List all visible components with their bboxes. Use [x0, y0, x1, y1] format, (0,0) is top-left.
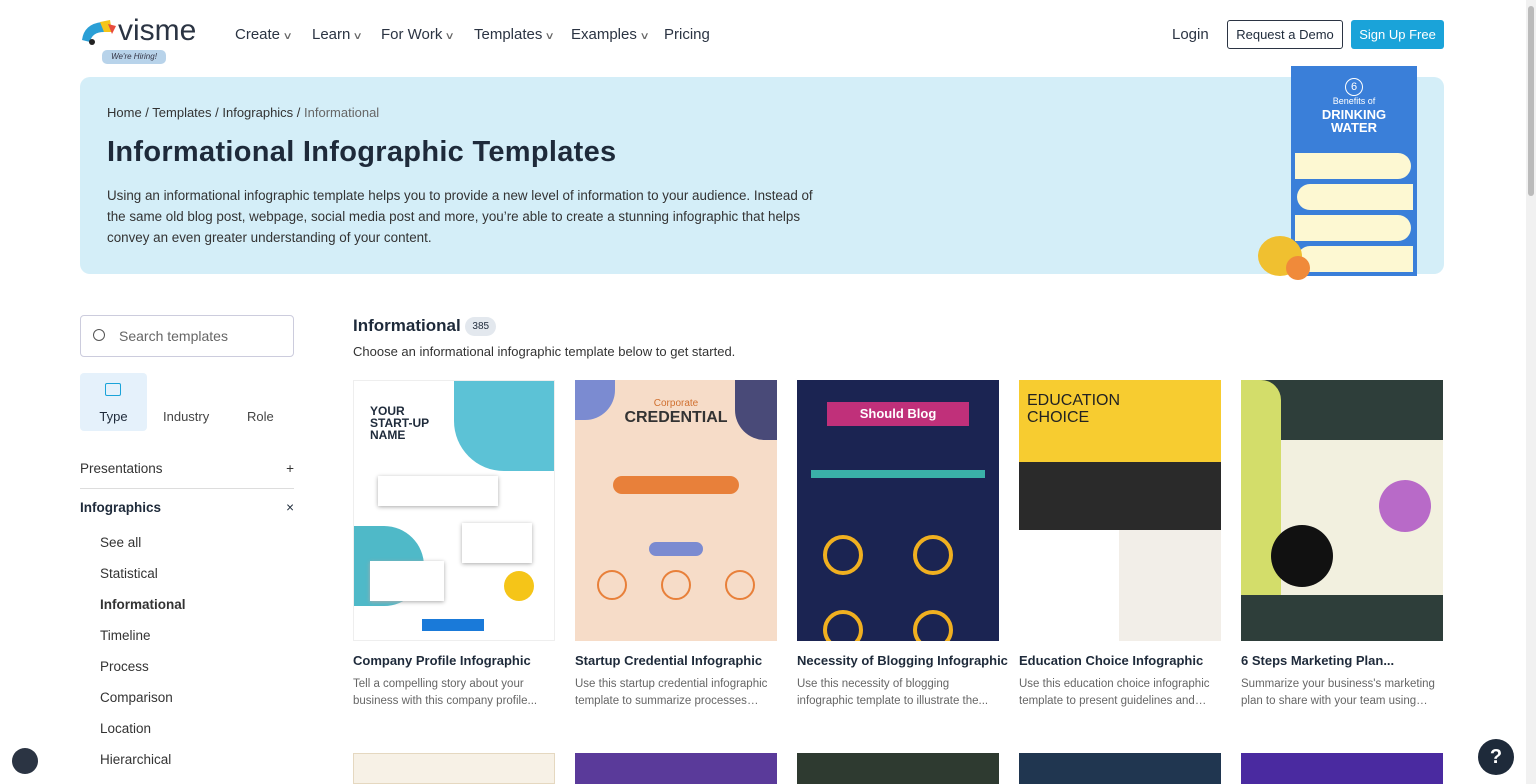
card: company profile: START-UP — [370, 416, 429, 430]
text: Industry — [163, 409, 209, 424]
card: startup credential: CREDENTIAL — [624, 409, 728, 426]
header — [82, 14, 1444, 64]
header: For Work — [381, 26, 442, 43]
filter tabs: Type — [99, 409, 128, 424]
scrollbar — [1526, 0, 1536, 784]
hero image: drinking water: DRINKING — [1322, 107, 1386, 122]
header: Login — [1172, 26, 1209, 43]
button: request demo — [1227, 20, 1343, 49]
section heading: Informational — [353, 316, 461, 335]
hero image: drinking water: Benefits of — [1333, 96, 1375, 106]
hero banner — [80, 77, 1444, 274]
card: company profile: Tell a compelling story about your business with this company profile... — [353, 678, 537, 707]
button: sign up — [1351, 20, 1444, 49]
logo — [82, 14, 196, 64]
hero image: drinking water: 6 — [1351, 81, 1357, 93]
text: Comparison — [100, 690, 173, 705]
header: Learn — [312, 26, 350, 43]
hero text: Using an informational infographic template helps you to provide a new level of information to your audience. Instead of the same old blog post, webpage, social media post and more, you’re able to create a stunning infographic that helps convey an even greater understanding of your content. — [107, 188, 813, 245]
section heading: 385 — [472, 321, 489, 332]
card: startup credential: Corporate — [654, 398, 698, 409]
hero title: Informational Infographic Templates — [107, 136, 616, 168]
breadcrumb: Home / Templates / Infographics / Informational — [107, 105, 379, 120]
text: Informational — [100, 597, 186, 612]
header: Pricing — [664, 26, 710, 43]
help button — [1478, 739, 1514, 775]
card: blogging — [797, 380, 1008, 707]
text: Hierarchical — [100, 752, 171, 767]
card: startup credential: Startup Credential Infographic — [575, 653, 762, 668]
text: Choose an informational infographic template below to get started. — [353, 344, 735, 359]
sidebar categories: + — [286, 461, 294, 476]
header: ∨ — [445, 31, 455, 42]
search box: Search templates — [119, 328, 228, 344]
sidebar categories: Presentations — [80, 461, 163, 476]
second row thumbnails — [353, 753, 555, 784]
card: company profile: YOUR — [370, 404, 405, 418]
nav menu: ∨ — [283, 31, 293, 42]
button: request demo: Request a Demo — [1236, 27, 1334, 42]
text: Infographics — [80, 500, 161, 515]
card: blogging: Use this necessity of blogging infographic template to illustrate the... — [797, 678, 988, 707]
text: Process — [100, 659, 149, 674]
card: startup credential — [575, 380, 777, 707]
header: Templates — [474, 26, 542, 43]
text: Timeline — [100, 628, 151, 643]
card: company profile — [353, 380, 555, 707]
button: sign up: Sign Up Free — [1359, 27, 1436, 42]
header: ∨ — [639, 31, 650, 42]
hero image: drinking water — [1291, 66, 1417, 276]
search box — [80, 315, 294, 357]
text: Location — [100, 721, 151, 736]
card: education choice: Education Choice Infographic — [1019, 653, 1203, 668]
card: education choice — [1019, 380, 1221, 707]
card: marketing plan — [1241, 380, 1443, 707]
sidebar categories — [80, 461, 294, 476]
nav menu: Create — [235, 26, 280, 43]
card: company profile: NAME — [370, 428, 405, 442]
card: education choice: EDUCATION — [1027, 392, 1120, 409]
header: ∨ — [353, 31, 363, 42]
filter tabs — [80, 373, 147, 431]
header: Examples — [571, 26, 637, 43]
card: blogging: Should Blog — [860, 406, 936, 421]
text: See all — [100, 535, 141, 550]
text: × — [286, 500, 294, 515]
card: marketing plan: 6 Steps Marketing Plan... — [1241, 653, 1394, 668]
logo: visme — [118, 14, 196, 47]
cookie icon — [12, 748, 38, 774]
text: Statistical — [100, 566, 158, 581]
card: education choice: CHOICE — [1027, 409, 1089, 426]
logo: We're Hiring! — [111, 52, 157, 61]
help button: ? — [1490, 746, 1502, 768]
card: company profile: Company Profile Infographic — [353, 653, 531, 668]
hero image: drinking water: WATER — [1331, 120, 1377, 135]
text: Role — [247, 409, 274, 424]
header: ∨ — [545, 31, 555, 42]
card: blogging: Necessity of Blogging Infographic — [797, 653, 1008, 668]
